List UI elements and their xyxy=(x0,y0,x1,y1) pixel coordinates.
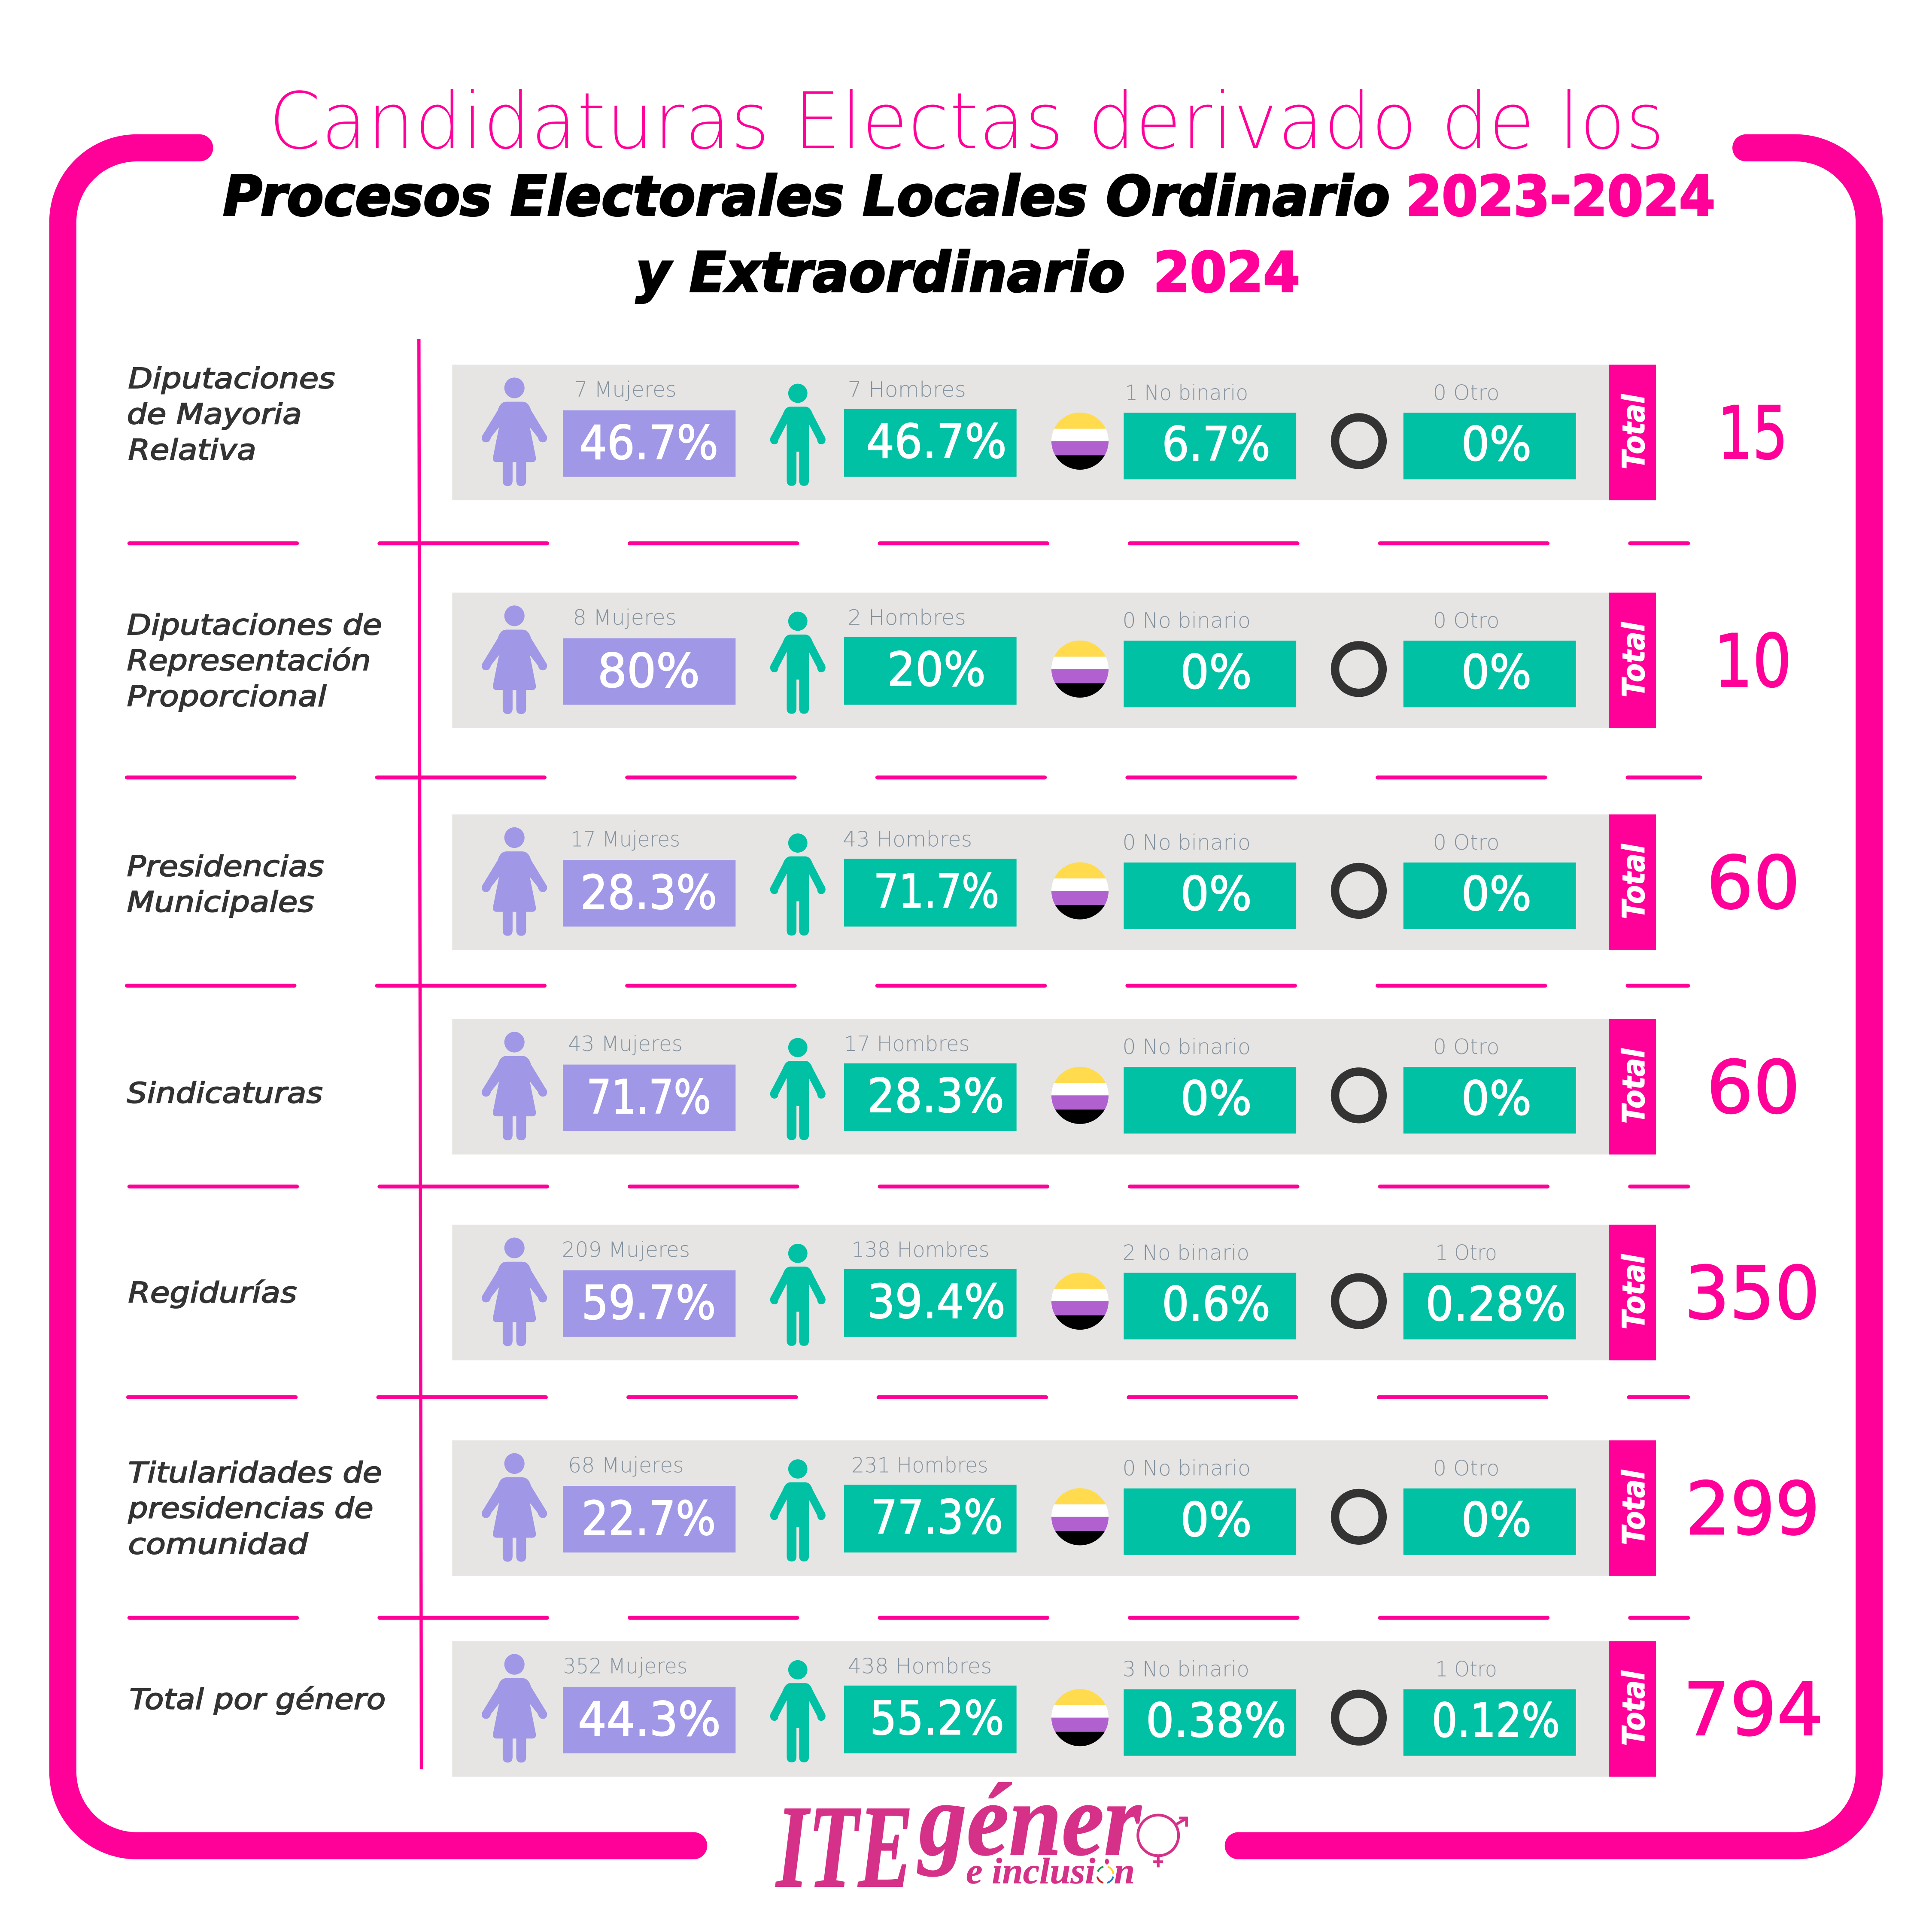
otro percent: 0% xyxy=(1461,1071,1531,1126)
hombres box xyxy=(844,1269,1017,1337)
logo género: géner xyxy=(917,1762,1142,1877)
total number: 299 xyxy=(1686,1467,1820,1551)
mujeres percent: 46.7% xyxy=(579,416,718,470)
total tab xyxy=(1609,592,1656,728)
mujeres count: 8 Mujeres xyxy=(573,605,677,630)
row label: Diputaciones de xyxy=(127,608,382,641)
hombres count: 438 Hombres xyxy=(848,1654,992,1678)
total tab label: Total xyxy=(1616,622,1652,697)
hombres percent: 39.4% xyxy=(867,1274,1005,1329)
icon: woman xyxy=(482,1654,547,1762)
no binario percent: 6.7% xyxy=(1162,417,1270,471)
logo gender symbol xyxy=(1138,1815,1187,1867)
total tab xyxy=(1609,365,1656,500)
total tab xyxy=(1609,1440,1656,1576)
no binario count: 3 No binario xyxy=(1122,1657,1249,1681)
row background xyxy=(452,1225,1609,1360)
row: Diputaciones de Representación Proporcional xyxy=(127,592,1792,728)
no binario percent: 0% xyxy=(1180,866,1252,921)
row label: de Mayoria xyxy=(127,398,302,431)
mujeres count: 17 Mujeres xyxy=(571,827,680,852)
hombres percent: 55.2% xyxy=(870,1691,1004,1745)
total number: 60 xyxy=(1707,1045,1800,1130)
hombres box xyxy=(844,1063,1017,1131)
hombres percent: 28.3% xyxy=(867,1069,1004,1123)
no binario percent: 0% xyxy=(1180,1492,1252,1547)
icon: woman xyxy=(482,1238,547,1346)
row label: Regidurías xyxy=(128,1276,297,1309)
row label: Titularidades de xyxy=(128,1456,382,1489)
mujeres box xyxy=(563,860,735,927)
icon: woman xyxy=(482,605,547,714)
mujeres percent: 71.7% xyxy=(586,1070,711,1124)
mujeres percent: 59.7% xyxy=(582,1276,716,1330)
otro box xyxy=(1403,863,1576,929)
icon: ring xyxy=(1335,867,1382,914)
row: Diputaciones de Mayoria Relativa xyxy=(127,362,1788,500)
row: Regidurías xyxy=(128,1225,1820,1360)
no binario box xyxy=(1124,1273,1296,1340)
no binario box xyxy=(1124,641,1296,707)
icon: ring xyxy=(1335,1277,1382,1325)
otro percent: 0% xyxy=(1461,645,1531,699)
total tab label: Total xyxy=(1616,394,1652,469)
logo e inclusión: e inclusion xyxy=(966,1850,1135,1892)
total tab label: Total xyxy=(1616,1254,1652,1330)
total tab xyxy=(1609,1641,1656,1777)
total number: 350 xyxy=(1684,1251,1820,1336)
row label: Representación xyxy=(127,644,371,677)
hombres percent: 46.7% xyxy=(866,414,1007,469)
mujeres percent: 28.3% xyxy=(580,866,717,920)
hombres count: 7 Hombres xyxy=(848,377,966,402)
row background xyxy=(452,814,1609,950)
icon: ring xyxy=(1335,1072,1382,1119)
icon: non-binary flag xyxy=(1047,1487,1114,1547)
row label: presidencias de xyxy=(128,1492,374,1525)
icon: man xyxy=(770,1459,826,1561)
otro box xyxy=(1403,1488,1576,1555)
mujeres percent: 80% xyxy=(598,644,700,698)
otro count: 0 Otro xyxy=(1433,380,1500,405)
icon: man xyxy=(770,833,826,936)
icon: man xyxy=(770,1038,826,1140)
title xyxy=(223,76,1715,305)
mujeres percent: 22.7% xyxy=(582,1491,716,1546)
icon: woman xyxy=(482,827,547,936)
row: Titularidades de presidencias de comunidad xyxy=(128,1440,1820,1576)
icon: man xyxy=(770,612,826,714)
no binario box xyxy=(1124,1067,1296,1133)
title line 2: Procesos Electorales Locales Ordinario xyxy=(223,164,1390,228)
icon: non-binary flag xyxy=(1047,639,1114,699)
no binario count: 1 No binario xyxy=(1125,380,1248,405)
total number: 10 xyxy=(1714,619,1792,704)
row background xyxy=(452,1641,1609,1777)
no binario count: 2 No binario xyxy=(1122,1240,1249,1265)
title line 3: 2024 xyxy=(1153,241,1300,305)
no binario count: 0 No binario xyxy=(1122,1456,1251,1481)
no binario box xyxy=(1124,1689,1296,1756)
hombres box xyxy=(844,859,1017,927)
total number: 15 xyxy=(1718,391,1788,476)
icon: woman xyxy=(482,377,547,486)
row: Sindicaturas xyxy=(127,1019,1800,1154)
otro percent: 0% xyxy=(1461,866,1531,921)
row label: Presidencias xyxy=(127,850,324,883)
total tab xyxy=(1609,1225,1656,1360)
no binario count: 0 No binario xyxy=(1122,830,1251,855)
row label: Sindicaturas xyxy=(127,1077,323,1110)
hombres count: 138 Hombres xyxy=(851,1237,990,1262)
icon: non-binary flag xyxy=(1047,861,1114,921)
mujeres box xyxy=(563,410,735,477)
row label: Relativa xyxy=(128,433,256,466)
logo: ITE género e inclusión xyxy=(775,1762,1187,1912)
icon: non-binary flag xyxy=(1047,1688,1114,1748)
row label: Total por género xyxy=(129,1683,386,1716)
row: Presidencias Municipales xyxy=(127,814,1800,950)
mujeres box xyxy=(563,1270,735,1337)
mujeres count: 68 Mujeres xyxy=(568,1453,684,1478)
mujeres percent: 44.3% xyxy=(578,1692,721,1747)
mujeres count: 352 Mujeres xyxy=(563,1654,687,1678)
otro count: 0 Otro xyxy=(1433,1456,1500,1481)
otro count: 0 Otro xyxy=(1433,1035,1500,1059)
icon: woman xyxy=(482,1032,547,1140)
no binario percent: 0.38% xyxy=(1146,1693,1286,1748)
row: Total por género xyxy=(129,1641,1823,1777)
total number: 60 xyxy=(1707,841,1800,925)
icon: ring xyxy=(1335,645,1382,693)
otro percent: 0% xyxy=(1461,1492,1531,1547)
mujeres box xyxy=(563,1486,735,1552)
otro box xyxy=(1403,641,1576,707)
otro box xyxy=(1403,1273,1576,1340)
mujeres count: 43 Mujeres xyxy=(568,1032,683,1056)
otro count: 0 Otro xyxy=(1433,830,1500,855)
hombres count: 43 Hombres xyxy=(843,827,972,852)
total tab label: Total xyxy=(1616,1670,1652,1746)
title line 1: Candidaturas Electas derivado de los xyxy=(269,76,1665,167)
total tab label: Total xyxy=(1616,1048,1652,1124)
otro count: 1 Otro xyxy=(1435,1657,1497,1681)
hombres box xyxy=(844,1686,1017,1753)
no binario box xyxy=(1124,413,1296,479)
icon: man xyxy=(770,384,826,486)
mujeres box xyxy=(563,1687,735,1753)
icon: ring xyxy=(1335,417,1382,465)
icon: woman xyxy=(482,1453,547,1562)
row label: Proporcional xyxy=(127,680,327,713)
row background xyxy=(452,1440,1609,1576)
otro percent: 0.28% xyxy=(1425,1277,1566,1331)
hombres percent: 71.7% xyxy=(874,864,999,919)
mujeres count: 7 Mujeres xyxy=(574,377,677,402)
no binario percent: 0% xyxy=(1180,645,1252,699)
icon: ring xyxy=(1335,1493,1382,1540)
logo ITE: ITE xyxy=(775,1781,913,1912)
icon: man xyxy=(770,1244,826,1346)
total tab label: Total xyxy=(1616,1470,1652,1545)
icon: ring xyxy=(1335,1694,1382,1741)
otro count: 1 Otro xyxy=(1435,1240,1497,1265)
hombres box xyxy=(844,1485,1017,1552)
otro percent: 0% xyxy=(1461,417,1531,471)
hombres count: 17 Hombres xyxy=(844,1032,970,1056)
row label: comunidad xyxy=(128,1528,309,1561)
total tab xyxy=(1609,814,1656,950)
otro count: 0 Otro xyxy=(1433,608,1500,633)
hombres percent: 77.3% xyxy=(871,1490,1003,1545)
row background xyxy=(452,365,1609,500)
hombres count: 231 Hombres xyxy=(851,1453,988,1478)
no binario percent: 0.6% xyxy=(1162,1277,1270,1331)
icon: non-binary flag xyxy=(1047,1066,1114,1126)
vertical divider line xyxy=(419,339,422,1769)
no binario count: 0 No binario xyxy=(1122,608,1251,633)
no binario percent: 0% xyxy=(1180,1071,1252,1126)
total tab label: Total xyxy=(1616,844,1652,919)
logo coloured o xyxy=(1097,1859,1113,1883)
title line 2: 2023-2024 xyxy=(1406,164,1715,228)
row label: Municipales xyxy=(127,886,314,919)
no binario box xyxy=(1124,863,1296,929)
no binario count: 0 No binario xyxy=(1122,1035,1251,1059)
otro percent: 0.12% xyxy=(1432,1693,1560,1748)
row background xyxy=(452,1019,1609,1154)
hombres count: 2 Hombres xyxy=(848,605,966,630)
total tab xyxy=(1609,1019,1656,1154)
no binario box xyxy=(1124,1488,1296,1555)
hombres box xyxy=(844,637,1017,705)
mujeres box xyxy=(563,1065,735,1131)
otro box xyxy=(1403,1689,1576,1756)
row label: Diputaciones xyxy=(128,362,335,395)
icon: non-binary flag xyxy=(1047,412,1114,471)
title line 3: y Extraordinario xyxy=(636,241,1125,305)
mujeres count: 209 Mujeres xyxy=(562,1237,690,1262)
total number: 794 xyxy=(1683,1668,1823,1752)
hombres box xyxy=(844,409,1017,477)
mujeres box xyxy=(563,638,735,705)
hombres percent: 20% xyxy=(887,642,986,697)
row background xyxy=(452,592,1609,728)
icon: non-binary flag xyxy=(1047,1272,1114,1331)
otro box xyxy=(1403,413,1576,479)
otro box xyxy=(1403,1067,1576,1133)
icon: man xyxy=(770,1660,826,1762)
